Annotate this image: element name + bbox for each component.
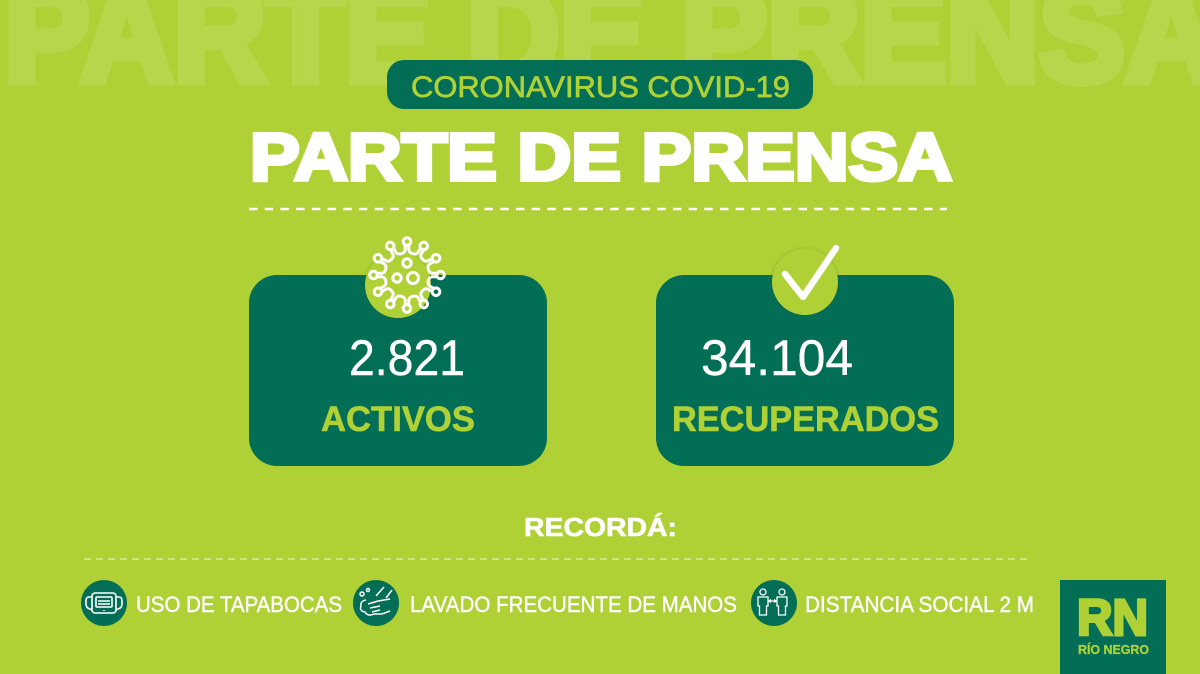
- logo letters: RN: [1077, 589, 1148, 646]
- badge: coronavirus covid-19: [387, 60, 813, 109]
- label: activos: ACTIVOS: [321, 400, 475, 439]
- label: recuperados: RECUPERADOS: [672, 400, 939, 439]
- heading: recordá: RECORDÁ:: [524, 512, 677, 542]
- icon badge: virus: [365, 237, 445, 318]
- reminder: uso de tapabocas: [81, 580, 342, 626]
- icon: face mask: [81, 580, 127, 626]
- text: distancia social: DISTANCIA SOCIAL 2 M: [805, 592, 1034, 617]
- panel: recuperados: [656, 248, 954, 466]
- logo: río negro: [1060, 580, 1166, 674]
- icon: social distance: [751, 580, 797, 626]
- text: uso de tapabocas: USO DE TAPABOCAS: [136, 592, 342, 617]
- number: recuperados: 34.104: [701, 330, 853, 386]
- badge: coronavirus covid-19: CORONAVIRUS COVID-19: [411, 71, 790, 104]
- reminder: lavado frecuente de manos: [353, 580, 737, 626]
- main title: PARTE DE PRENSA: [250, 120, 952, 195]
- number: activos: 2.821: [349, 330, 465, 386]
- logo name: RÍO NEGRO: [1078, 642, 1149, 657]
- icon badge: check mark: [772, 248, 838, 315]
- panel: activos: [249, 237, 547, 466]
- icon: washing hands: [353, 580, 399, 626]
- reminder: distancia social: [751, 580, 1034, 626]
- text: lavado frecuente de manos: LAVADO FRECUENTE DE MANOS: [410, 592, 737, 617]
